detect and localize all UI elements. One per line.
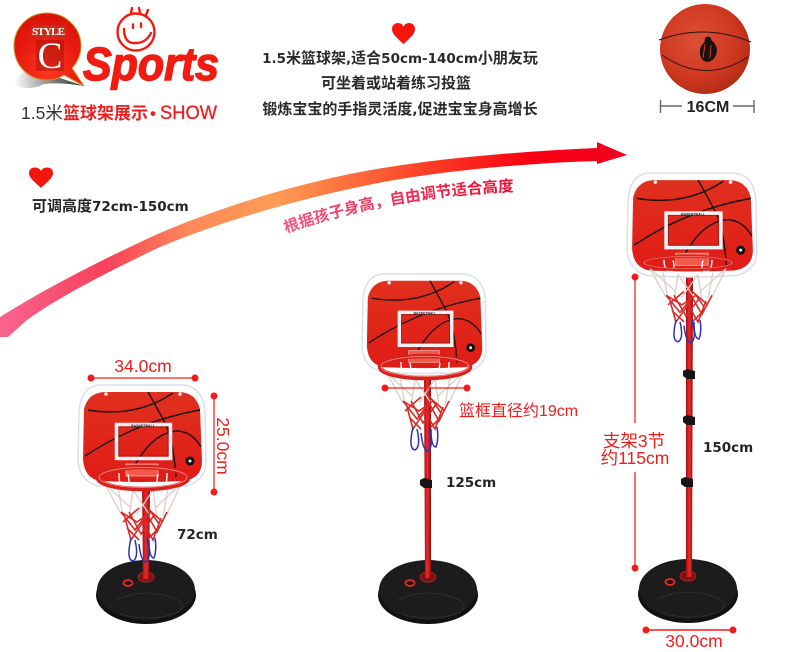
icon: heart left	[29, 168, 53, 188]
icon: red style C bubble	[14, 13, 84, 86]
base	[96, 560, 196, 624]
base width dimension 30.0cm	[642, 626, 736, 651]
logo: style C sports	[14, 8, 219, 90]
pole	[424, 378, 431, 578]
width dimension 34.0cm	[88, 356, 198, 382]
description text: 1.5米篮球架,适合50cm-140cm小朋友玩	[262, 49, 538, 67]
icon: heart top	[392, 23, 415, 44]
backboard	[362, 274, 486, 373]
pole length dimension	[601, 274, 669, 572]
height dimension 25.0cm: 25.0cm	[213, 417, 233, 475]
pole length dimension: 约115cm	[601, 448, 669, 468]
stand 1: 72cm	[78, 385, 206, 624]
icon: smiley	[118, 8, 154, 50]
hoop and net	[380, 356, 470, 451]
subtitle: •	[150, 104, 156, 123]
backboard: BASKETBALL	[414, 312, 436, 316]
hoop and net	[98, 467, 188, 562]
sports wordmark: Sports	[83, 38, 219, 90]
backboard: BASKETBALL	[681, 213, 706, 217]
arrow: growth curve	[0, 142, 627, 337]
rim diameter dimension: 篮框直径约19cm	[459, 402, 578, 420]
icon: basketball	[659, 4, 751, 94]
height dimension 25.0cm	[210, 392, 233, 496]
pole	[686, 276, 693, 577]
backboard: BASKETBALL	[131, 424, 156, 428]
arrow caption: 根据孩子身高，自由调节适合高度	[283, 178, 514, 234]
pole clamp	[420, 478, 432, 488]
subtitle: SHOW	[160, 103, 217, 124]
height range label: 可调高度72cm-150cm	[32, 197, 189, 215]
style label: STYLE	[32, 26, 65, 38]
label 150cm: 150cm	[703, 440, 753, 456]
size label 16CM: 16CM	[687, 99, 729, 116]
width dimension 34.0cm: 34.0cm	[114, 356, 172, 376]
pole clamps	[681, 369, 695, 487]
pole	[142, 488, 150, 579]
hoop and net	[643, 256, 733, 343]
label 125cm: 125cm	[446, 475, 496, 491]
description text: 可坐着或站着练习投篮	[321, 74, 471, 92]
backboard	[78, 385, 206, 488]
base	[638, 559, 738, 623]
subtitle: 篮球架展示	[63, 103, 148, 123]
base width dimension 30.0cm: 30.0cm	[665, 631, 723, 651]
label 72cm: 72cm	[177, 527, 218, 543]
backboard	[627, 173, 757, 277]
base	[378, 560, 478, 624]
subtitle: 1.5米	[21, 103, 63, 123]
subtitle	[21, 103, 217, 124]
letter C: C	[38, 36, 62, 77]
stand 3: 150cm	[627, 173, 757, 623]
description text: 锻炼宝宝的手指灵活度,促进宝宝身高增长	[262, 100, 538, 118]
rim diameter dimension	[382, 384, 578, 420]
description text	[262, 49, 538, 118]
pole length dimension: 支架3节	[603, 431, 665, 451]
stand 2: 125cm	[362, 274, 486, 624]
ball with size label	[659, 4, 754, 116]
icon: speech bubble shadow	[14, 70, 84, 88]
